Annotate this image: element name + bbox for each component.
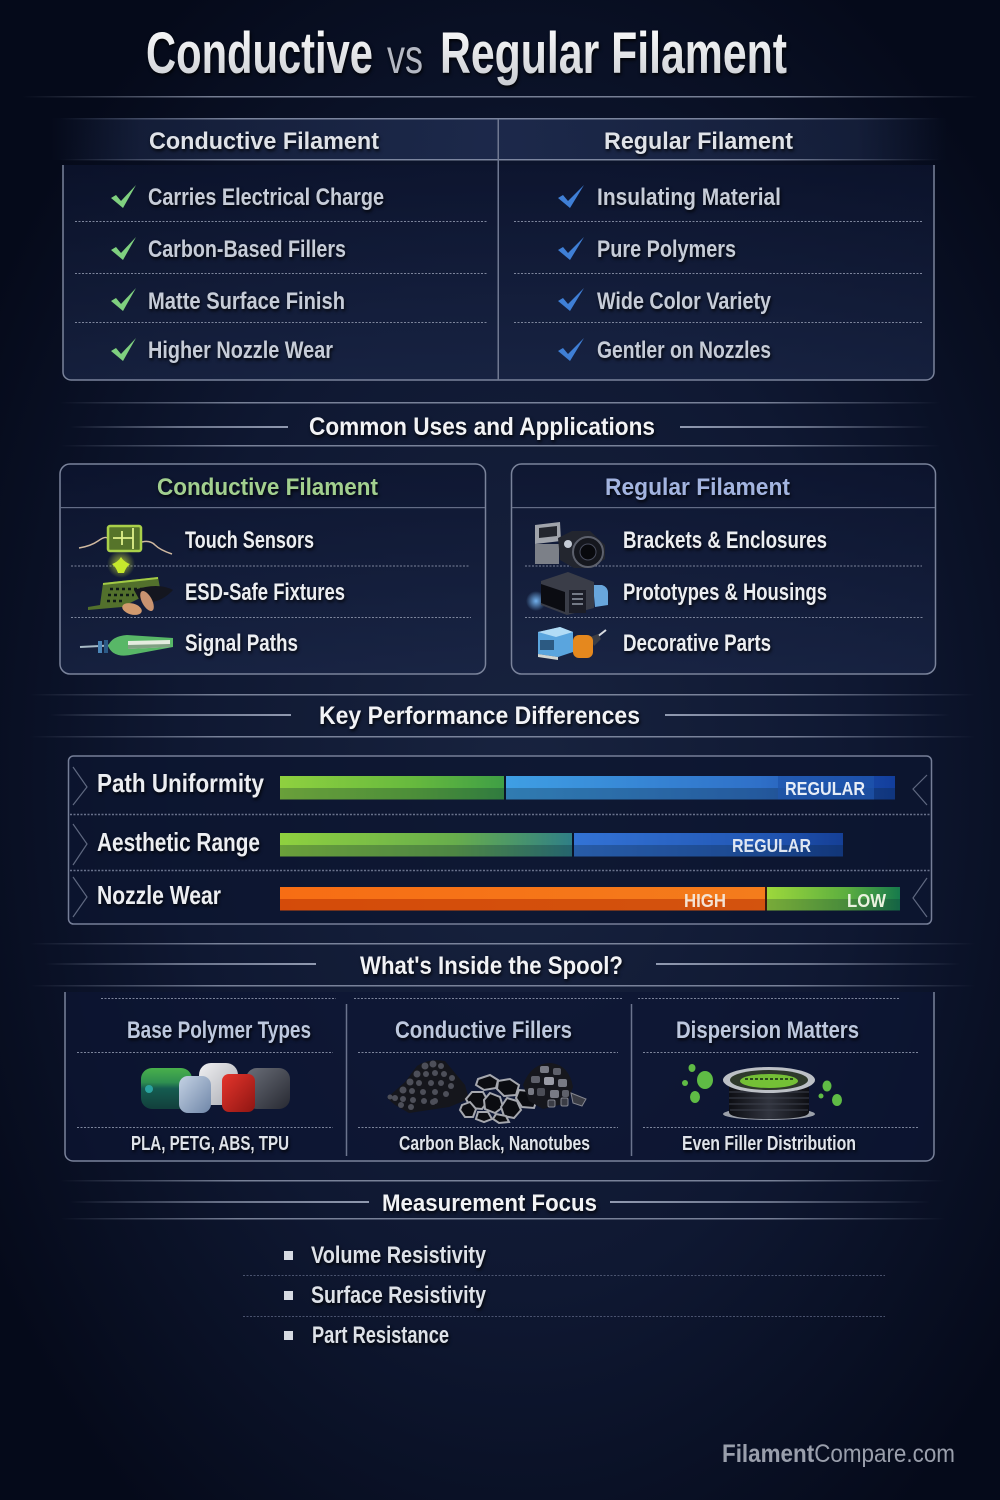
title (146, 21, 787, 86)
row labels: Nozzle Wear (97, 880, 221, 910)
icon: touch sensor (79, 526, 172, 578)
items (311, 1242, 487, 1349)
bar: path uniformity: REGULAR (785, 779, 865, 799)
headings (127, 1017, 859, 1044)
regular list: Pure Polymers (597, 236, 736, 263)
list: Decorative Parts (623, 630, 771, 657)
panel: performance bars (68, 756, 932, 924)
title: Regular Filament (440, 21, 787, 86)
conductive list (148, 184, 384, 364)
panel: comparison table (50, 118, 947, 380)
items: Surface Resistivity (311, 1282, 487, 1309)
headings: Dispersion Matters (676, 1017, 859, 1044)
items: Volume Resistivity (311, 1242, 487, 1269)
row labels (97, 768, 264, 910)
bar: aesthetic range (280, 833, 843, 856)
section heading: inside the spool: What's Inside the Spool? (360, 952, 623, 980)
list: ESD-Safe Fixtures (185, 579, 345, 606)
row labels: Aesthetic Range (97, 827, 260, 857)
bar: nozzle wear: LOW (847, 891, 886, 911)
icon: carbon fillers (387, 1060, 586, 1123)
bar: path uniformity (280, 776, 895, 800)
icon: signal path (80, 635, 173, 656)
regular checks (558, 185, 584, 361)
conductive list: Matte Surface Finish (148, 288, 345, 315)
panel: regular uses (512, 464, 936, 674)
icon: prototype housing (526, 572, 608, 615)
headings: Base Polymer Types (127, 1017, 311, 1044)
items: Part Resistance (312, 1322, 449, 1349)
icon: decorative parts (538, 627, 606, 660)
regular list: Wide Color Variety (597, 288, 772, 315)
heading: regular column: Regular Filament (604, 128, 793, 155)
heading: Regular Filament (605, 474, 790, 501)
captions: Carbon Black, Nanotubes (399, 1133, 590, 1155)
conductive list: Carbon-Based Fillers (148, 236, 346, 263)
section heading: measurement focus: Measurement Focus (382, 1190, 597, 1217)
title: vs (387, 31, 423, 84)
row labels: Path Uniformity (97, 768, 264, 798)
section heading: common uses: Common Uses and Applications (309, 413, 655, 441)
list (185, 527, 345, 657)
conductive list: Higher Nozzle Wear (148, 337, 333, 364)
heading: Conductive Filament (157, 474, 378, 501)
regular list: Insulating Material (597, 184, 781, 211)
list: Prototypes & Housings (623, 579, 827, 606)
headings: Conductive Fillers (395, 1017, 572, 1044)
icon: polymer blocks (141, 1063, 290, 1113)
side chevrons (73, 767, 927, 917)
list: Touch Sensors (185, 527, 314, 554)
regular list: Gentler on Nozzles (597, 337, 771, 364)
title: Conductive (146, 21, 373, 86)
icon: dispersion spool (682, 1064, 842, 1120)
bar: nozzle wear: HIGH (684, 891, 726, 911)
conductive checks (111, 185, 136, 361)
pile of carbon black (387, 1060, 469, 1113)
nanotube cluster (460, 1075, 537, 1123)
panel: inside the spool (65, 992, 934, 1161)
list (623, 527, 827, 657)
measurement list (243, 1242, 885, 1349)
bar: nozzle wear (280, 887, 900, 911)
captions (131, 1133, 856, 1155)
bar: aesthetic range: REGULAR (732, 836, 811, 856)
list: Brackets & Enclosures (623, 527, 827, 554)
captions: Even Filler Distribution (682, 1133, 856, 1155)
icon: ESD fixture (88, 577, 173, 617)
icon: camera bracket (535, 522, 605, 568)
heading: conductive column: Conductive Filament (149, 128, 379, 155)
list: Signal Paths (185, 630, 298, 657)
captions: PLA, PETG, ABS, TPU (131, 1133, 289, 1155)
bullets (284, 1251, 293, 1340)
footer brand: FilamentCompare.com (722, 1440, 955, 1468)
panel: conductive uses (60, 464, 486, 674)
graphene dome (523, 1063, 586, 1109)
section heading: key performance differences: Key Performance Differences (319, 702, 640, 730)
conductive list: Carries Electrical Charge (148, 184, 384, 211)
regular list (597, 184, 781, 364)
